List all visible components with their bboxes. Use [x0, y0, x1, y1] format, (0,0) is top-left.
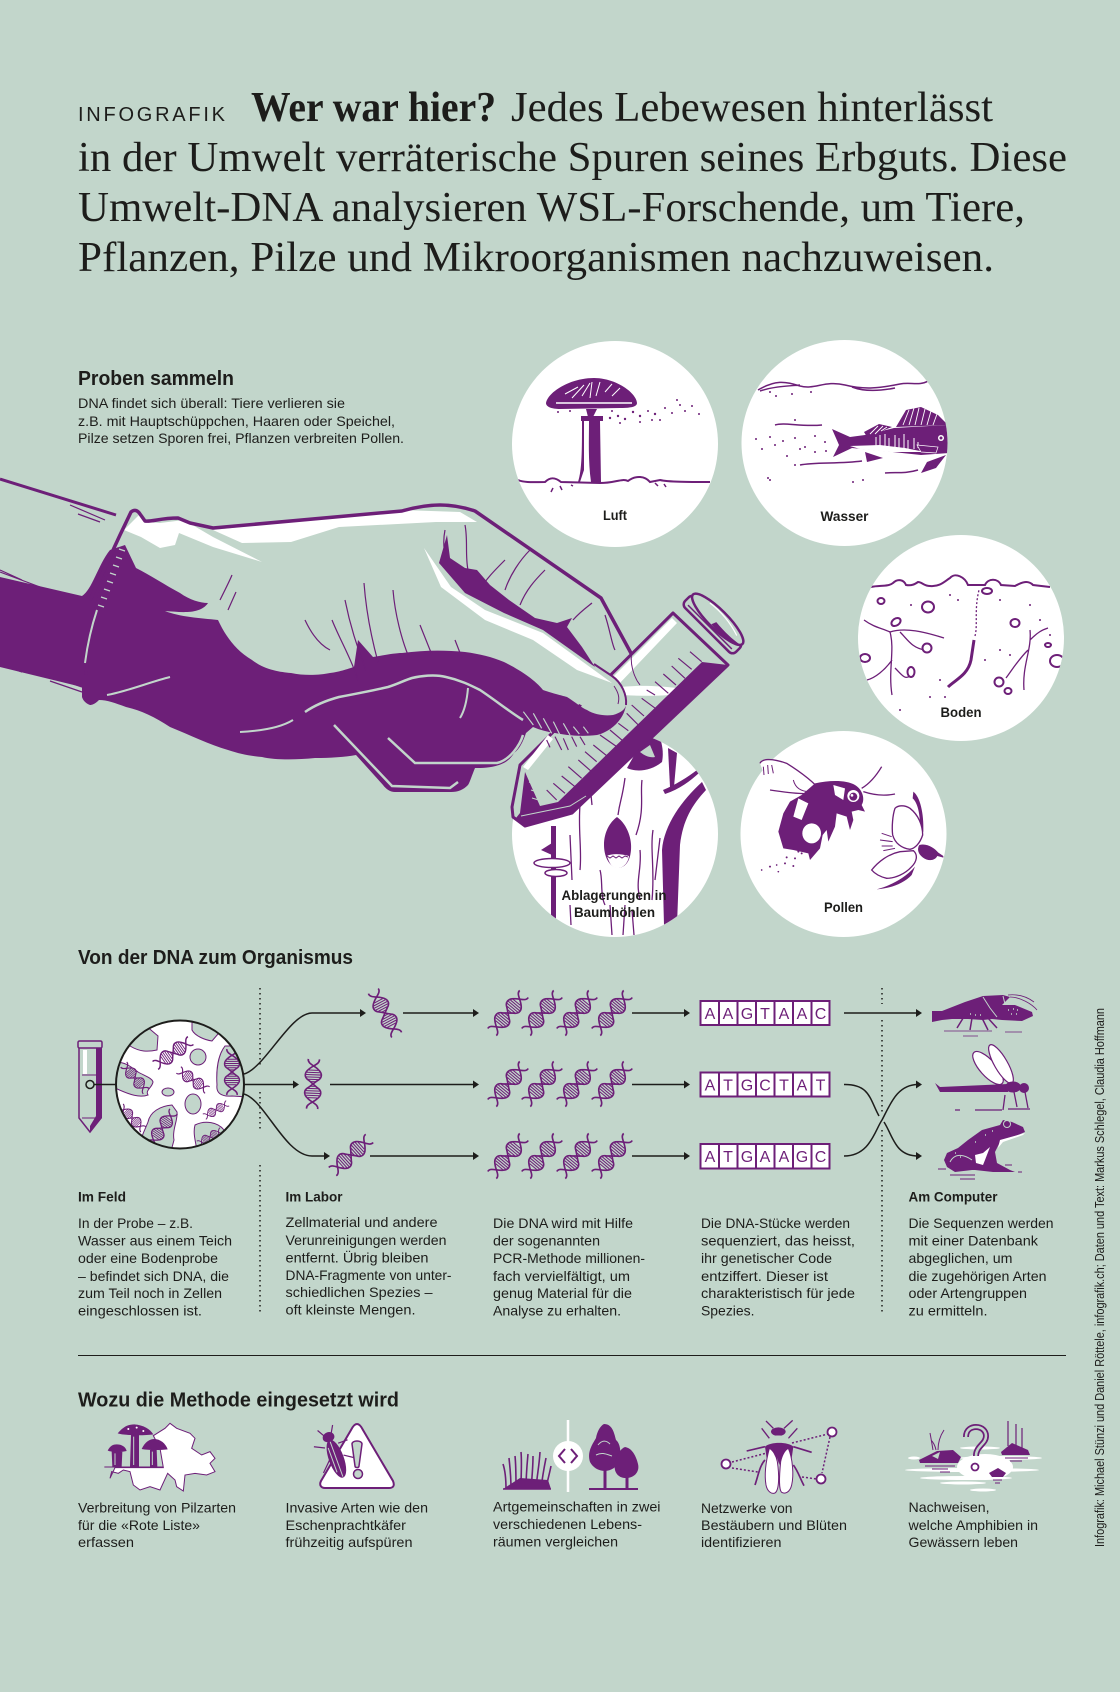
sequence box ATGCTAT: A: [705, 1078, 716, 1094]
sequence box ATGAAGC: G: [796, 1149, 808, 1166]
section heading: Von der DNA zum Organismus: Von der DNA zum Organismus: [78, 947, 353, 969]
step text: oft kleinste Mengen.: [286, 1302, 416, 1318]
amplified DNA copies row 3: [486, 1132, 634, 1180]
text: Amphibien: Gewässern leben: [908, 1534, 1018, 1550]
sequence box AAGTAAC: A: [705, 1006, 716, 1023]
icon: frog: [938, 1120, 1025, 1179]
icon: mushrooms and map of Switzerland: [104, 1423, 215, 1491]
hand in glove: [0, 479, 632, 792]
text: Artgemeinschaften: [493, 1498, 660, 1550]
bee body: [778, 781, 865, 860]
glove white highlights: [124, 510, 477, 562]
step text: PCR: PCR-Methode millionen-: [493, 1250, 645, 1266]
step text: Die Sequenzen werden: [908, 1215, 1054, 1231]
step text: entfernt. Übrig bleiben: [286, 1248, 428, 1266]
title block: [78, 85, 1067, 281]
sequence box ATGCTAT: C: [759, 1078, 771, 1094]
text: Rote Liste: Verbreitung von Pilzarten: [78, 1500, 236, 1516]
step text: PCR: Die DNA wird mit Hilfe: [493, 1215, 633, 1231]
label: Ablagerungen in: [562, 887, 666, 903]
finger shadow: [439, 535, 595, 667]
step text: [78, 1215, 232, 1318]
tube rim: [682, 587, 750, 655]
credits vertical: Infografik: Michael Stünzi und Daniel Röttele, infografik.ch; Daten und Text: Markus Schlegel, Claudia Hoffmann: [1093, 1008, 1107, 1547]
circle: Wasser: [742, 340, 950, 546]
circle: Luft: [512, 341, 718, 547]
step text: PCR: Analyse zu erhalten.: [493, 1302, 621, 1318]
bee wing: [760, 760, 822, 794]
text: Eschenprachtkäfer: [286, 1500, 428, 1550]
headline line 2: in der Umwelt verräterische Spuren seines Erbguts. Diese: [78, 135, 1067, 181]
magnified sample circle: [115, 1018, 248, 1155]
step text: Sequenzierung: [701, 1215, 855, 1318]
intro text: DNA findet sich überall: Tiere verlieren sie: [78, 395, 345, 411]
step text: PCR: genug Material für die: [493, 1285, 632, 1301]
tube thick shaded edge: [516, 662, 728, 826]
amplified DNA copies row 1: [486, 989, 634, 1037]
step text: eingeschlossen ist.: [78, 1302, 202, 1318]
step: Im Feld: [78, 1190, 232, 1318]
sequence box ATGCTAT: T: [779, 1078, 789, 1094]
amplified DNA copies row 2: [486, 1060, 634, 1108]
knuckle wrinkles: [220, 525, 615, 680]
sequence box ATGAAGC: C: [815, 1149, 826, 1166]
step text: Zellmaterial und andere: [286, 1214, 438, 1230]
sequence box ATGAAGC: A: [779, 1149, 790, 1166]
icon: pollinator network: [722, 1420, 836, 1493]
step text: schiedlichen Spezies –: [286, 1284, 433, 1300]
step text: Sequenzierung: Spezies.: [701, 1302, 754, 1318]
headline bold lead: Wer war hier?: [251, 85, 496, 131]
step text: Verunreinigungen werden: [286, 1232, 446, 1248]
step text: Sequenzierung: charakteristisch für jede: [701, 1285, 855, 1301]
finger tip outline: [594, 664, 626, 705]
step text: PCR: der sogenannten: [493, 1232, 600, 1248]
thumb underside hatch: [523, 712, 588, 735]
step text: PCR: [493, 1215, 645, 1318]
intro text: [78, 395, 404, 446]
label: Baumhöhlen: [574, 904, 655, 920]
intro text: Pilze setzen Sporen frei, Pflanzen verbreiten Pollen.: [78, 430, 404, 446]
step text: zu ermitteln.: [908, 1302, 988, 1318]
text: Netzwerke: identifizieren: [701, 1534, 782, 1550]
sequence box ATGAAGC: [700, 1144, 830, 1168]
step text: Sequenzierung: sequenziert, das heisst,: [701, 1232, 855, 1248]
sequence box ATGCTAT: [700, 1072, 830, 1096]
text: Rote Liste: für die «Rote Liste»: [78, 1517, 200, 1533]
thumb and finger contours: [305, 675, 523, 720]
icon: soil with roots and worm: [860, 575, 1064, 711]
step text: mit einer Datenbank: [908, 1232, 1039, 1248]
text: Eschenprachtkäfer: Eschenprachtkäfer: [286, 1517, 406, 1533]
step text: abgeglichen, um: [908, 1250, 1012, 1266]
sequence box ATGCTAT: A: [797, 1078, 808, 1094]
circle: Pollen: [740, 731, 946, 937]
text: Eschenprachtkäfer: Invasive Arten wie den: [286, 1500, 428, 1516]
test tube held by hand: [512, 587, 750, 826]
sequence box ATGCTAT: T: [723, 1078, 733, 1094]
icon: mushroom with spores: [518, 378, 710, 492]
text: Amphibien: welche Amphibien in: [907, 1517, 1038, 1533]
tube highlights: [523, 618, 677, 770]
label: Wasser: [820, 508, 869, 524]
text: Netzwerke: Netzwerke von: [701, 1500, 792, 1516]
sequence box ATGAAGC: T: [723, 1149, 733, 1166]
headline line 4: Pflanzen, Pilze und Mikroorganismen nachzuweisen.: [78, 235, 994, 281]
step text: PCR: fach vervielfältigt, um: [493, 1268, 630, 1284]
step text: oder eine Bodenprobe: [78, 1250, 218, 1266]
section: Proben sammeln text: [78, 368, 404, 446]
headline line 3: Umwelt-DNA analysieren WSL-Forschende, um Tiere,: [78, 185, 1025, 231]
flow arrows to fragments: [244, 1013, 918, 1156]
text: Amphibien: [907, 1499, 1038, 1550]
headline line 1: Jedes Lebewesen hinterlässt: [511, 85, 993, 131]
circle: Baumhöhlen: [512, 731, 718, 937]
icon: tree with hollow: [534, 733, 706, 935]
sequence box AAGTAAC: A: [779, 1006, 790, 1023]
flower: [913, 792, 923, 833]
step text: Sequenzierung: ihr genetischer Code: [701, 1250, 832, 1266]
sequence box ATGAAGC: G: [741, 1149, 753, 1166]
step heading: Im Labor: [286, 1190, 343, 1204]
step text: In der Probe – z.B.: [78, 1215, 193, 1231]
heading: Proben sammeln: [78, 368, 234, 390]
section heading: Wozu die Methode eingesetzt wird: Wozu die Methode eingesetzt wird: [78, 1390, 399, 1412]
sequence box ATGAAGC: A: [705, 1149, 716, 1166]
dotted dividers: [260, 988, 882, 1315]
sequence box AAGTAAC: A: [723, 1006, 734, 1023]
step heading: Am Computer: [908, 1190, 998, 1204]
glove outline: [90, 505, 632, 655]
sequence box AAGTAAC: C: [815, 1006, 826, 1023]
sequence box AAGTAAC: A: [797, 1006, 808, 1023]
icon: fish in water: [755, 381, 950, 483]
single DNA fragments: [304, 987, 404, 1178]
text: Artgemeinschaften: verschiedenen Lebens-: [493, 1516, 642, 1532]
step text: die zugehörigen Arten: [908, 1268, 1046, 1284]
tube body: [512, 613, 728, 826]
icon: bumblebee and flower: [760, 760, 943, 889]
sequence box AAGTAAC: [700, 1001, 830, 1025]
icon: amphibians question in water: [905, 1421, 1042, 1492]
arrow heads: [293, 1009, 922, 1160]
finger tip mask: [555, 640, 626, 717]
step text: zum Teil noch in Zellen: [78, 1285, 222, 1301]
circle: Boden: [858, 535, 1064, 741]
step: Im Labor: [286, 1190, 452, 1318]
step text: DNA-Fragmente von unter-: [286, 1267, 452, 1283]
step text: oder Artengruppen: [908, 1285, 1027, 1301]
sample tube in field: [78, 1041, 102, 1132]
text: Amphibien: Nachweisen,: [908, 1499, 990, 1515]
sequence box ATGCTAT: T: [816, 1078, 826, 1094]
step text: Sequenzierung: entziffert. Dieser ist: [701, 1268, 828, 1284]
text: Rote Liste: [78, 1500, 236, 1550]
text: Artgemeinschaften: Artgemeinschaften in zwei: [493, 1498, 660, 1514]
cell material and DNA: [117, 1022, 243, 1147]
cuff rim hatch: [86, 548, 119, 675]
step: Am Computer: [908, 1190, 1054, 1318]
intro text: z.B. mit Hauptschüppchen, Haaren oder Speichel,: [78, 413, 395, 429]
sequence box AAGTAAC: T: [760, 1006, 770, 1023]
sleeve outline: [0, 479, 116, 515]
text: Netzwerke: [701, 1500, 847, 1550]
text: Eschenprachtkäfer: frühzeitig aufspüren: [286, 1534, 412, 1550]
kicker: Infografik: INFOGRAFIK: [78, 104, 226, 126]
connector tube to circle: [94, 1084, 116, 1086]
step text: [286, 1214, 452, 1318]
text: Netzwerke: Bestäubern und Blüten: [701, 1517, 847, 1533]
icon: grass and trees comparison: [503, 1420, 638, 1492]
step text: [908, 1215, 1054, 1318]
icon: dragonfly: [935, 1042, 1030, 1110]
step heading: Im Feld: [78, 1190, 126, 1204]
label: Luft: [603, 507, 627, 523]
label: Boden: [940, 704, 982, 720]
label: [562, 887, 666, 920]
step text: Sequenzierung: Die DNA-Stücke werden: [701, 1215, 850, 1231]
step text: Wasser aus einem Teich: [78, 1232, 232, 1248]
icon: beetle and warning triangle: [309, 1422, 394, 1488]
sequence box AAGTAAC: G: [741, 1006, 753, 1023]
sequence box ATGAAGC: A: [760, 1149, 771, 1166]
label: Pollen: [824, 899, 863, 915]
icon: crayfish: [932, 995, 1037, 1036]
glove and arm shadow: [0, 545, 626, 792]
text: Rote Liste: erfassen: [78, 1534, 134, 1550]
tube graduation strokes and tip hatch: [547, 652, 702, 800]
text: Artgemeinschaften: räumen vergleichen: [493, 1534, 618, 1550]
sequence box ATGCTAT: G: [741, 1078, 753, 1094]
step text: – befindet sich DNA, die: [78, 1268, 229, 1284]
